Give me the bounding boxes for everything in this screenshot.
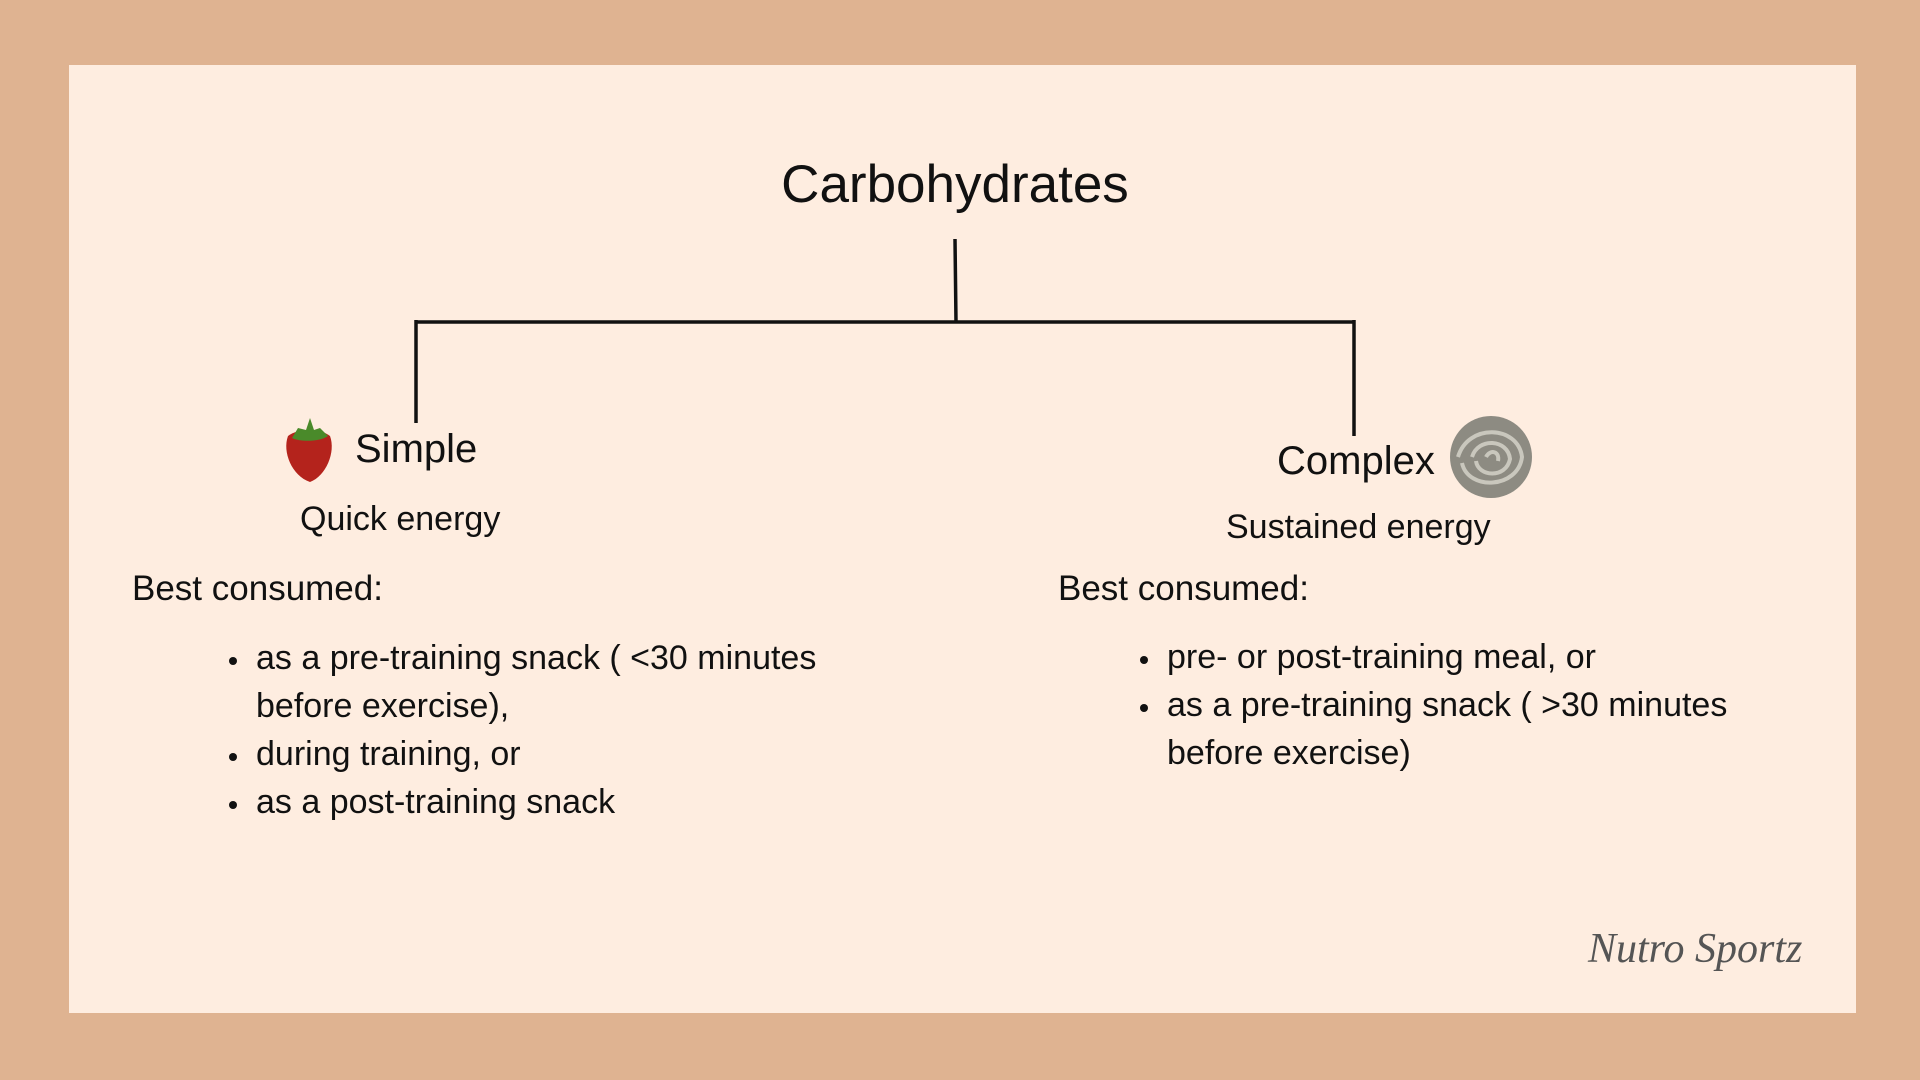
list: simple carbs timing: during training, or bbox=[256, 735, 521, 773]
logo: Nutro Sportz: Nutro Sportz bbox=[1588, 926, 1802, 972]
icon: pasta nest bbox=[1450, 416, 1532, 498]
title: Carbohydrates bbox=[781, 155, 1129, 214]
list: simple carbs timing bbox=[229, 639, 816, 821]
list: simple carbs timing: before exercise), bbox=[256, 687, 509, 725]
heading: Complex: Complex bbox=[1277, 439, 1435, 483]
list: complex carbs timing bbox=[1140, 638, 1727, 772]
text block: left best consumed: Best consumed: bbox=[132, 569, 383, 608]
text block: right best consumed: Best consumed: bbox=[1058, 569, 1309, 608]
list: complex carbs timing: pre- or post-training meal, or bbox=[1167, 638, 1596, 676]
list: simple carbs timing: as a pre-training snack ( <30 minutes bbox=[256, 639, 816, 677]
text: Quick energy: Quick energy bbox=[300, 500, 500, 538]
list: simple carbs timing: as a post-training snack bbox=[256, 783, 615, 821]
list: complex carbs timing: as a pre-training snack ( >30 minutes bbox=[1167, 686, 1727, 724]
list: complex carbs timing: before exercise) bbox=[1167, 734, 1411, 772]
icon: strawberry bbox=[286, 418, 332, 482]
heading: Simple: Simple bbox=[355, 427, 477, 471]
text: Sustained energy: Sustained energy bbox=[1226, 508, 1491, 546]
